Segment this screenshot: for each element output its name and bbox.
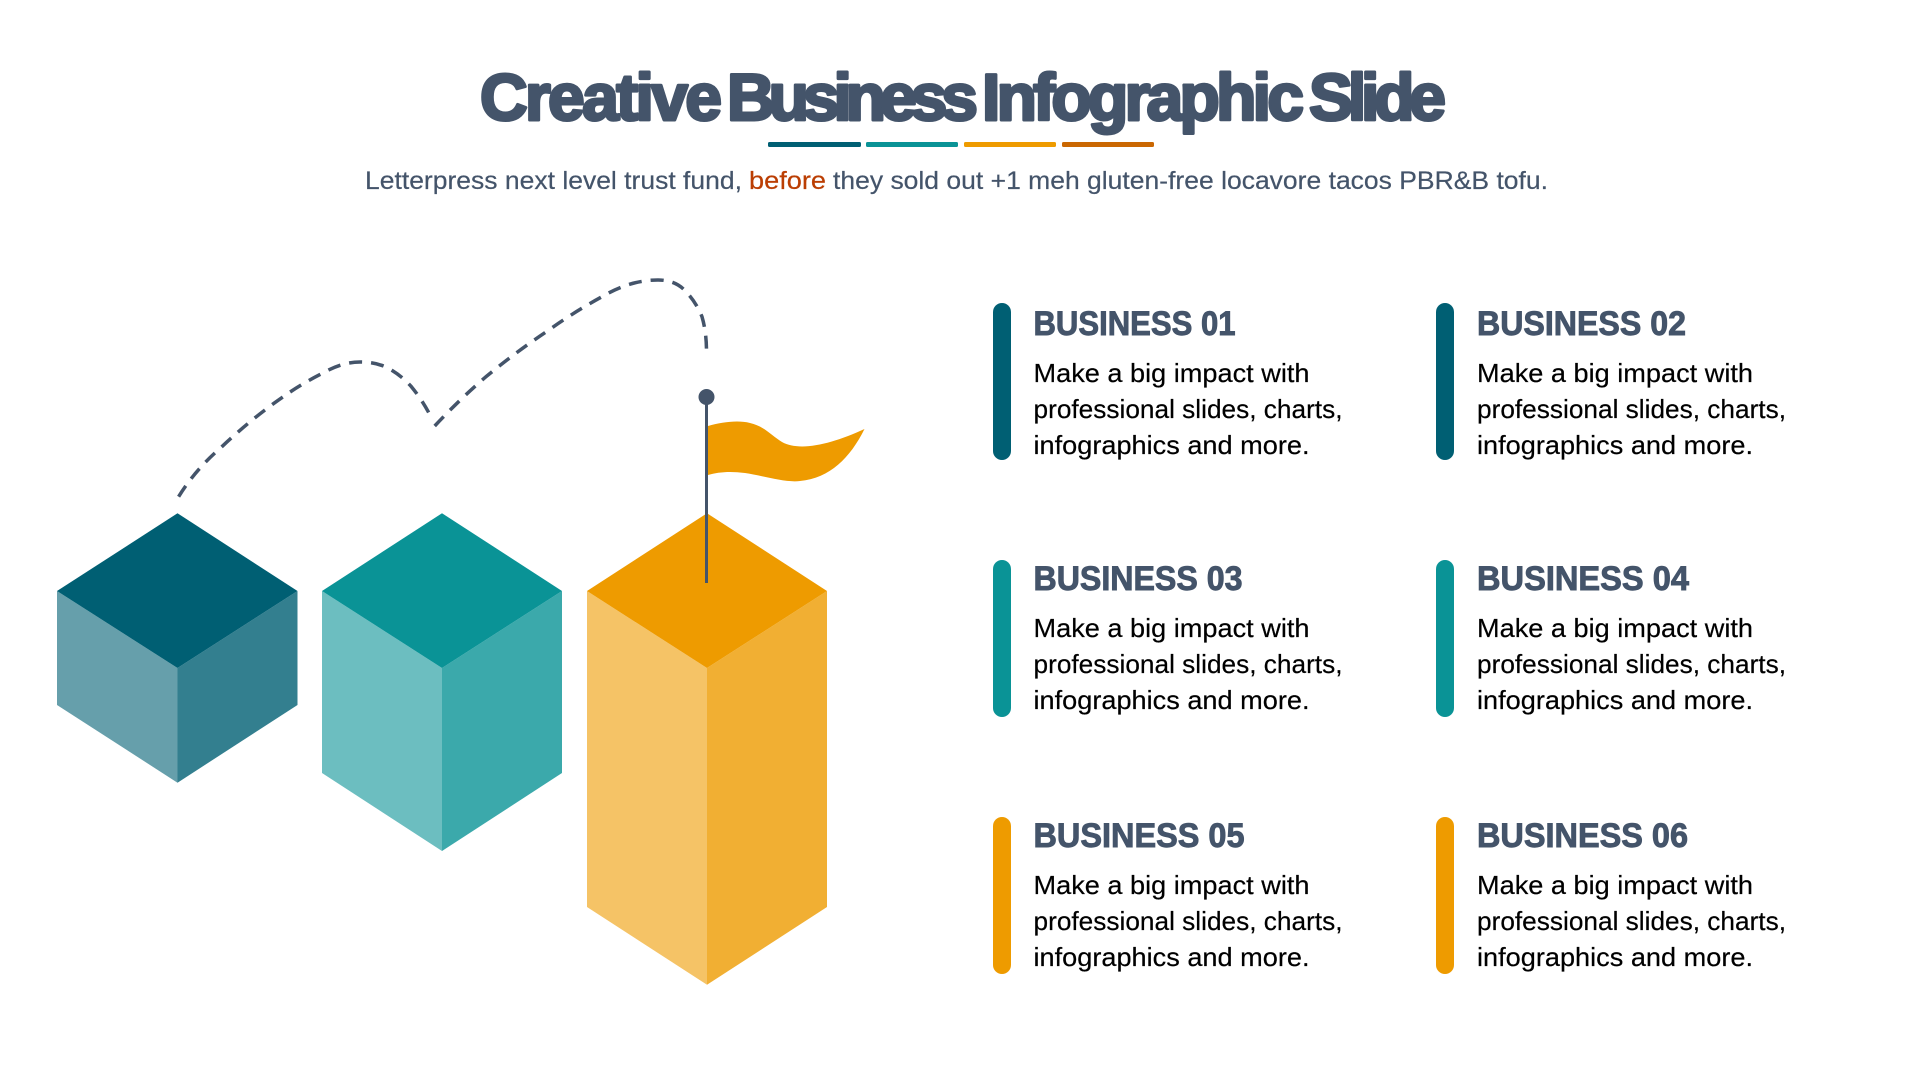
card: business 04: infographics and more. — [1477, 685, 1753, 715]
title underline colour bars — [768, 142, 1154, 147]
cube 3 — [587, 513, 827, 985]
dashed jump path — [179, 280, 707, 497]
card: business 02: BUSINESS 02 — [1477, 305, 1686, 343]
cube 1 — [57, 513, 298, 783]
card: business 05 — [993, 817, 1342, 974]
card: business 01 — [993, 303, 1342, 460]
title — [480, 60, 1446, 134]
card: business 06: professional slides, charts, — [1477, 906, 1786, 936]
card: business 03: professional slides, charts, — [1034, 649, 1342, 679]
card: business 01: professional slides, charts, — [1034, 394, 1342, 424]
card: business 02: infographics and more. — [1477, 430, 1753, 460]
subtitle: before — [749, 167, 826, 195]
card: business 06 — [1436, 817, 1786, 974]
card: business 05: professional slides, charts, — [1034, 906, 1342, 936]
card: business 03: infographics and more. — [1034, 685, 1310, 715]
card: business 06: Make a big impact with — [1477, 870, 1753, 900]
card: business 06: BUSINESS 06 — [1477, 817, 1688, 855]
title: Infographic — [982, 60, 1304, 134]
card: business 05: Make a big impact with — [1034, 870, 1310, 900]
card: business 05: infographics and more. — [1034, 942, 1310, 972]
card: business 04 — [1436, 560, 1786, 717]
card: business 03: Make a big impact with — [1034, 613, 1310, 643]
card: business 06: infographics and more. — [1477, 942, 1753, 972]
card: business 05: BUSINESS 05 — [1034, 817, 1244, 855]
card: business 02: Make a big impact with — [1477, 358, 1753, 388]
icon: flag — [698, 389, 864, 583]
subtitle: they sold out +1 meh gluten-free locavore tacos PBR&B tofu. — [833, 167, 1548, 195]
card: business 02: professional slides, charts, — [1477, 394, 1786, 424]
title: Slide — [1309, 60, 1446, 134]
card: business 04: BUSINESS 04 — [1477, 560, 1689, 598]
subtitle: Letterpress next level trust fund, — [365, 167, 742, 195]
cube 2 — [322, 513, 562, 851]
title: Business — [727, 60, 978, 134]
title: Creative — [480, 60, 722, 134]
card: business 01: infographics and more. — [1034, 430, 1310, 460]
card: business 01: Make a big impact with — [1034, 358, 1310, 388]
card: business 04: Make a big impact with — [1477, 613, 1753, 643]
card: business 02 — [1436, 303, 1786, 460]
card: business 04: professional slides, charts, — [1477, 649, 1786, 679]
card: business 01: BUSINESS 01 — [1034, 305, 1236, 343]
subtitle — [365, 167, 1548, 195]
card: business 03 — [993, 560, 1342, 717]
card: business 03: BUSINESS 03 — [1034, 560, 1242, 598]
